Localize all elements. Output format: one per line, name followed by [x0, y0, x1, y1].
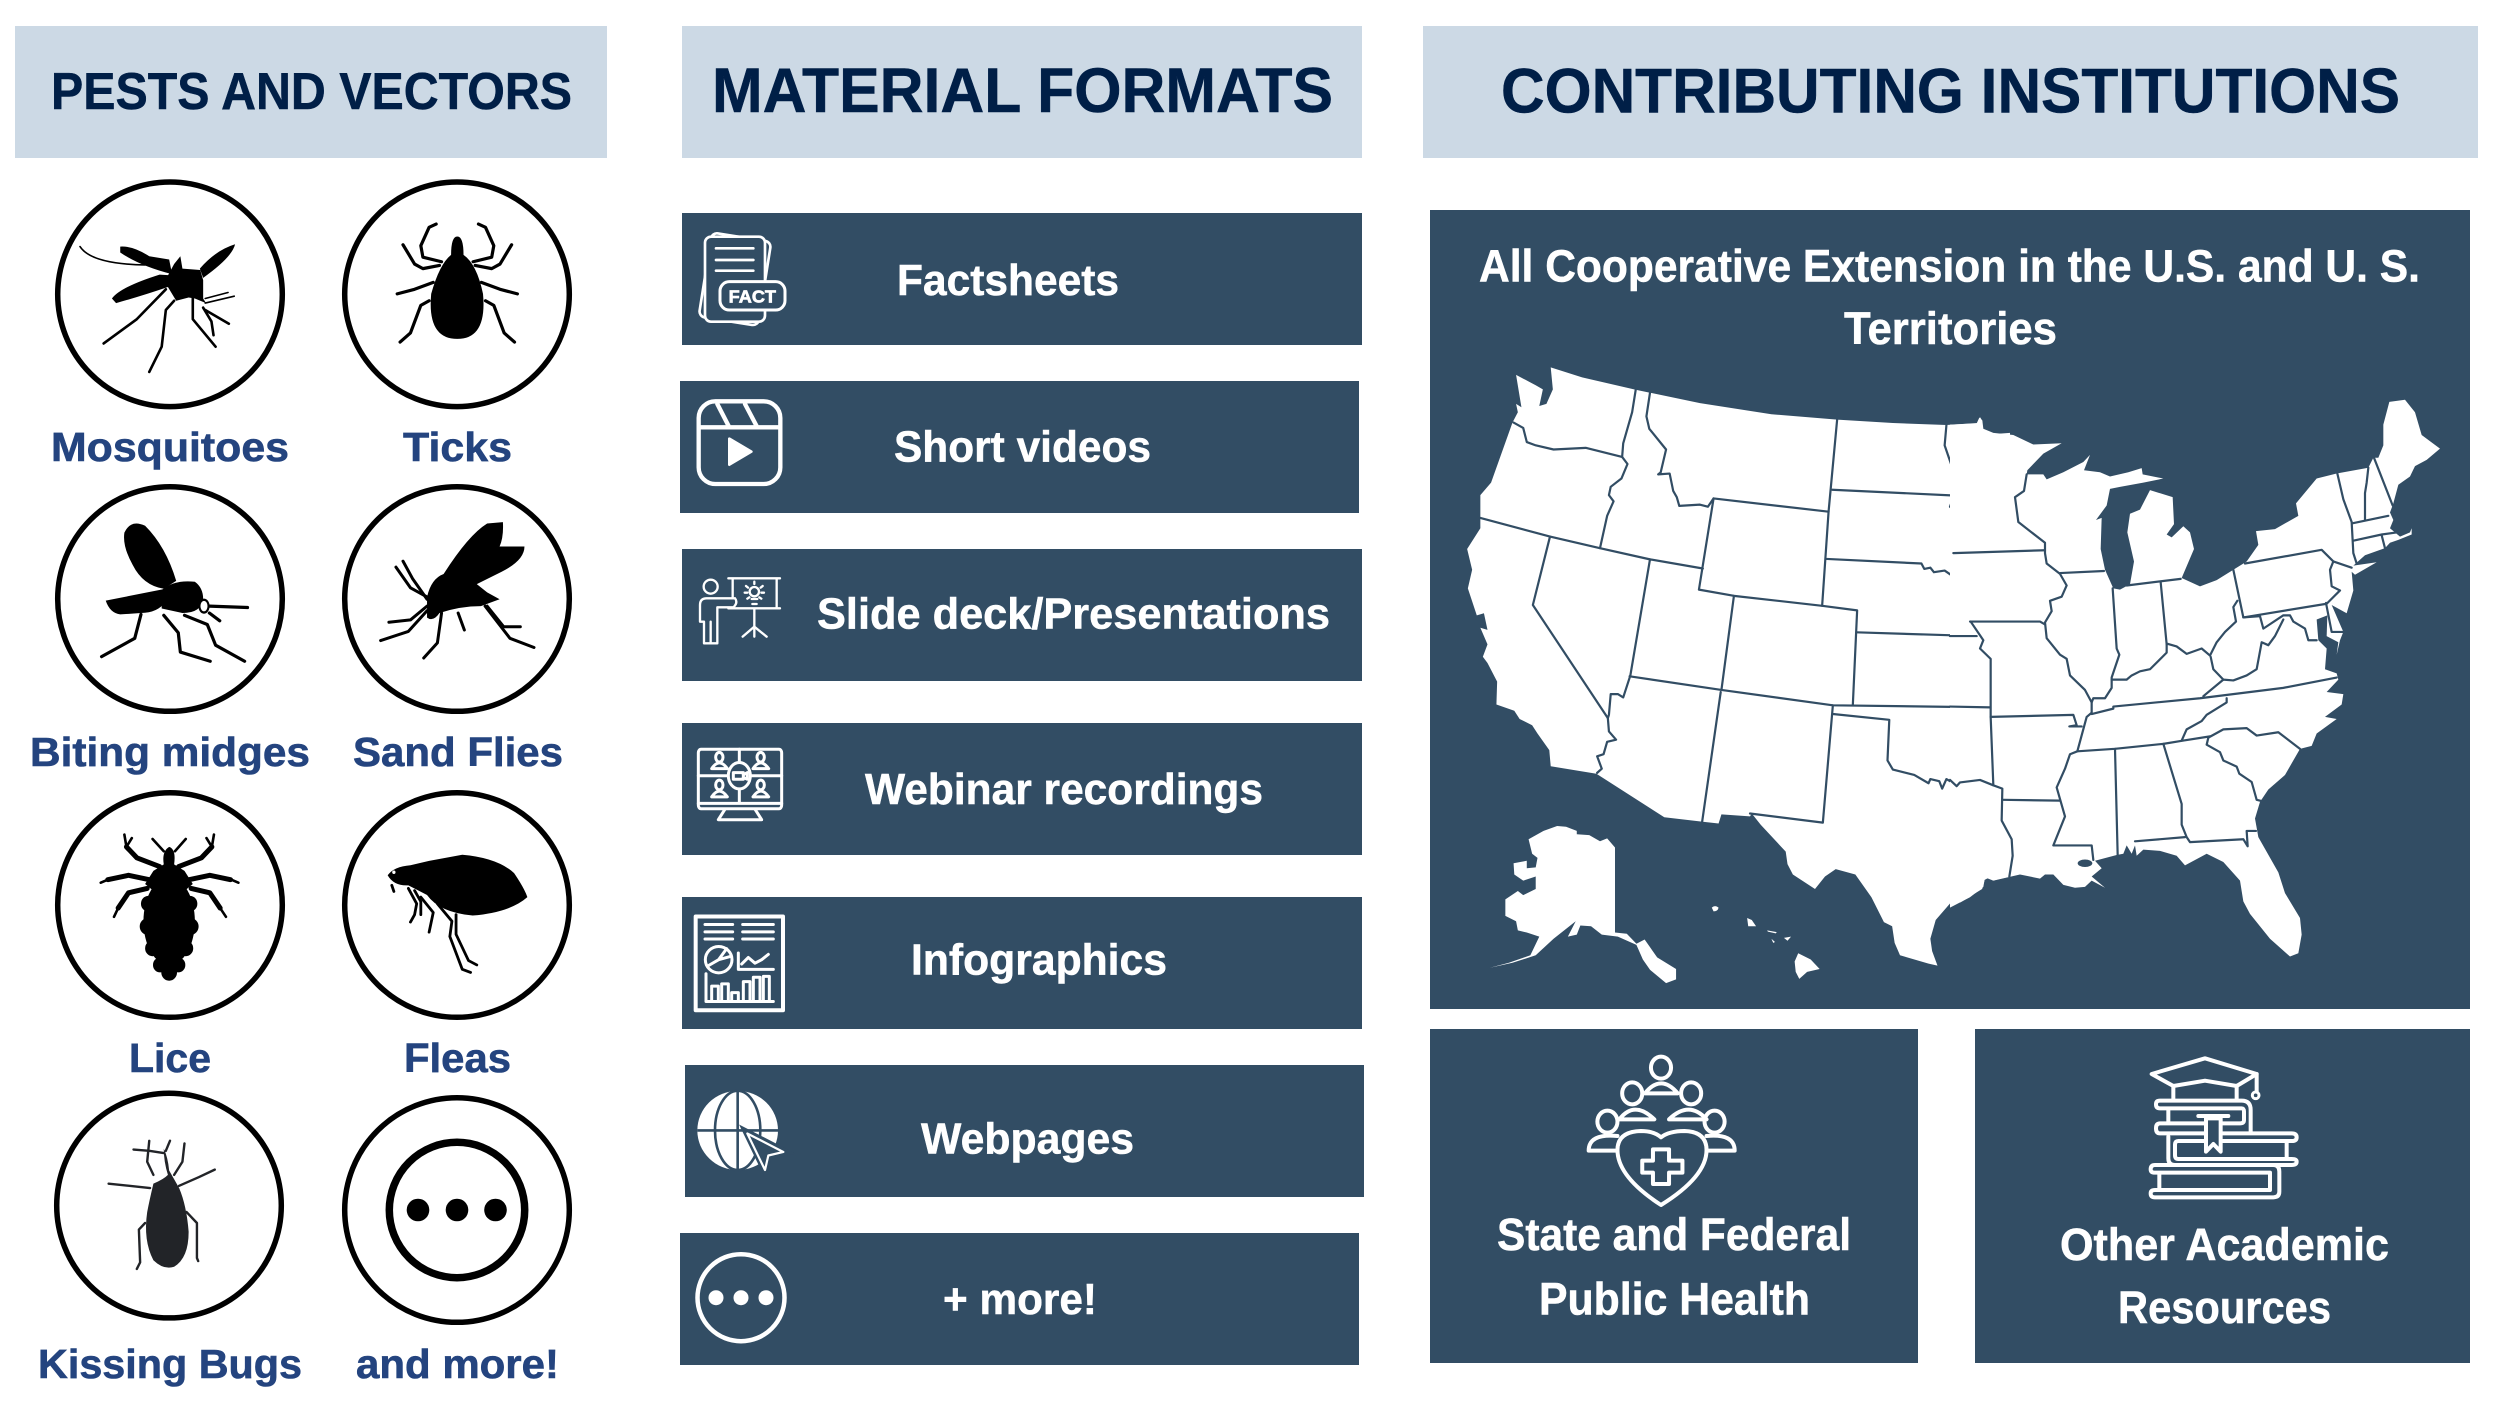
row: webpages: [685, 1065, 1364, 1197]
label: short videos: Short videos: [894, 422, 1151, 472]
icon: fact sheet: [699, 232, 785, 326]
icon: webinar monitor: [698, 749, 782, 820]
label: slide deck: Slide deck/Presentations: [817, 590, 1330, 638]
heading: pests and vectors: [15, 26, 607, 158]
label: more: + more!: [943, 1275, 1097, 1324]
label: webpages: Webpages: [921, 1114, 1134, 1164]
icon: video clapper: [699, 401, 780, 484]
label: other academic resources: [2060, 1219, 2389, 1333]
label: and more: and more!: [356, 1341, 559, 1387]
panel: state and federal public health: [1430, 1029, 1918, 1363]
label: infographics: Infographics: [911, 936, 1167, 984]
icon: globe with cursor: [697, 1091, 783, 1170]
row: slide deck: [682, 549, 1362, 681]
icon: books and graduation cap: [2151, 1058, 2297, 1197]
row: factsheets: [682, 213, 1362, 345]
icon: fact sheet: FACT: [729, 286, 776, 306]
label: lice: Lice: [129, 1035, 211, 1081]
icon: infographic sheet: [696, 917, 783, 1010]
panel: pests and vectors: [15, 26, 607, 1387]
heading: contributing institutions: [1423, 26, 2478, 158]
row: infographics: [682, 897, 1362, 1029]
icon: heart and people: [1589, 1057, 1735, 1205]
title: cooperative extension: Territories: [1844, 303, 2057, 354]
title: cooperative extension: All Cooperative Extension in the U.S. and U. S.: [1479, 240, 2420, 292]
label: sand flies: Sand Flies: [353, 729, 563, 775]
panel: material formats: [680, 26, 1364, 1365]
row: more: [680, 1233, 1359, 1365]
heading: contributing institutions: CONTRIBUTING INSTITUTIONS: [1501, 56, 2400, 126]
panel: cooperative extension map: [1430, 210, 2470, 1009]
icon: biting midge: [58, 487, 282, 711]
label: webinar recordings: Webinar recordings: [865, 765, 1263, 814]
row: webinar recordings: [682, 723, 1362, 855]
label: kissing bugs: Kissing Bugs: [38, 1341, 302, 1387]
icon: and more: [345, 1098, 569, 1322]
map: United States: [1467, 367, 2440, 983]
label: ticks: Ticks: [403, 424, 512, 470]
heading: pests and vectors: PESTS AND VECTORS: [51, 63, 572, 121]
label: state and federal public health: Public Health: [1539, 1274, 1810, 1324]
label: biting midges: Biting midges: [30, 729, 310, 775]
icon: kissing bug: [57, 1093, 281, 1318]
title: cooperative extension: [1479, 240, 2420, 354]
panel: contributing institutions: [1423, 26, 2478, 1363]
label: other academic resources: Resources: [2118, 1282, 2331, 1333]
heading: material formats: MATERIAL FORMATS: [712, 56, 1333, 126]
row: short videos: [680, 381, 1359, 513]
panel: other academic resources: [1975, 1029, 2470, 1363]
label: fleas: Fleas: [404, 1035, 511, 1081]
label: mosquitoes: Mosquitoes: [51, 424, 289, 470]
heading: material formats: [682, 26, 1362, 158]
icon: tick: [345, 182, 569, 407]
icon: louse: [58, 793, 282, 1017]
label: factsheets: Factsheets: [897, 256, 1119, 305]
icon: presenter: [700, 578, 780, 643]
label: state and federal public health: [1497, 1209, 1851, 1324]
icon: more dots: [698, 1254, 784, 1341]
icon: flea: [345, 793, 569, 1017]
label: other academic resources: Other Academic: [2060, 1219, 2389, 1270]
icon: sand fly: [345, 487, 569, 711]
icon: mosquito: [58, 182, 282, 407]
label: state and federal public health: State and Federal: [1497, 1209, 1851, 1260]
